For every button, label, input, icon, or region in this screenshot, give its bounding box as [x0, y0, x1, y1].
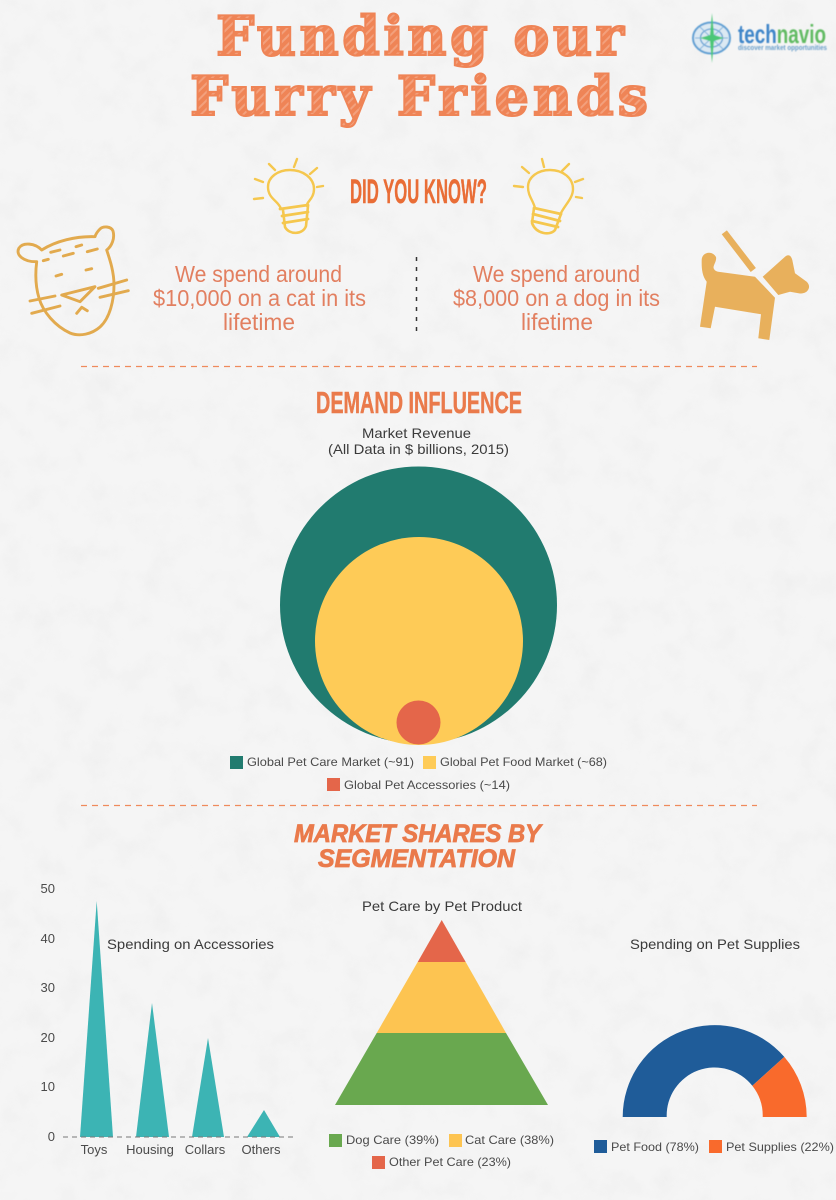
legend: Cat Care (38%) [465, 1133, 554, 1147]
infographic canvas: DID YOU KNOW? [350, 173, 487, 211]
chart: spending on accessories [41, 881, 294, 1157]
chart: nested circles market revenue [280, 466, 557, 745]
y axis labels: 10 [41, 1079, 55, 1094]
chart title: market revenue [328, 425, 509, 457]
text: dog spending: We spend around [473, 261, 640, 287]
text: cat spending: $10,000 on a cat in its [153, 285, 366, 311]
x axis labels: Others [241, 1142, 281, 1157]
heading: market shares by segmentation: SEGMENTATION [318, 845, 516, 873]
x axis labels [81, 1142, 281, 1157]
x axis labels: Collars [185, 1142, 226, 1157]
legend [329, 1133, 554, 1169]
y axis labels: 50 [41, 881, 55, 896]
chart title: market revenue: (All Data in $ billions, 2015) [328, 441, 509, 457]
y axis labels: 30 [41, 980, 55, 995]
text: cat spending: We spend around [175, 261, 342, 287]
heading: market shares by segmentation: MARKET SHARES BY [294, 820, 543, 848]
text: cat spending [153, 261, 366, 335]
title: Funding our [216, 4, 625, 68]
legend: Pet Food (78%) [611, 1140, 699, 1154]
pyramid [335, 920, 548, 1105]
icon: cat [18, 227, 128, 335]
chart title: Pet Care by Pet Product [362, 898, 522, 914]
x axis labels: Housing [126, 1142, 174, 1157]
legend [594, 1140, 834, 1154]
chart title: Spending on Accessories [107, 936, 274, 952]
y axis labels: 20 [41, 1030, 55, 1045]
text: dog spending: lifetime [521, 309, 593, 335]
logo tagline: discover market opportunities [738, 45, 827, 52]
half donut [623, 1025, 807, 1117]
text: cat spending: lifetime [223, 309, 295, 335]
text: dog spending: $8,000 on a dog in its [453, 285, 660, 311]
chart title: market revenue: Market Revenue [362, 425, 471, 441]
legend: market revenue: Global Pet Care Market (~91) [247, 755, 414, 769]
x axis labels: Toys [81, 1142, 108, 1157]
icon: dog on leash [700, 232, 809, 340]
text: dog spending [453, 261, 660, 335]
legend: market revenue: Global Pet Accessories (~14) [344, 778, 510, 792]
logo: technavio [693, 13, 827, 63]
legend: market revenue [230, 755, 607, 792]
icon: light bulb left [254, 159, 323, 233]
chart: pet care by pet product [329, 898, 554, 1169]
legend: Dog Care (39%) [346, 1133, 439, 1147]
title: Furry Friends [190, 64, 648, 128]
chart: spending on pet supplies [594, 936, 834, 1154]
icon: compass [693, 13, 730, 63]
heading: demand influence: DEMAND INFLUENCE [316, 385, 522, 420]
legend: Other Pet Care (23%) [389, 1155, 511, 1169]
title [190, 4, 648, 128]
chart title: Spending on Pet Supplies [630, 936, 800, 952]
legend: market revenue: Global Pet Food Market (~68) [440, 755, 607, 769]
legend: Pet Supplies (22%) [726, 1140, 834, 1154]
y axis labels: 0 [48, 1129, 55, 1144]
y axis labels [41, 881, 55, 1144]
icon: light bulb right [514, 159, 583, 233]
y axis labels: 40 [41, 931, 55, 946]
heading: market shares by segmentation [294, 820, 543, 873]
triangle bars [80, 901, 280, 1137]
